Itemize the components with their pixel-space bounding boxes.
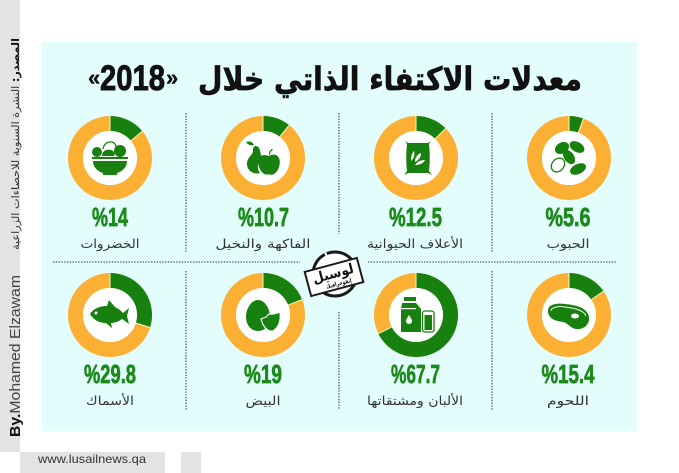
panel: animal feed (367, 116, 463, 252)
label: الفاكهة والنخيل (216, 236, 310, 252)
value: %15.4 (542, 359, 595, 389)
panel: meat (534, 273, 604, 409)
label: الخضروات (80, 236, 140, 252)
panel: fish (76, 273, 150, 408)
icon: beans (549, 139, 588, 177)
panel: fruit and dates (216, 116, 310, 252)
panel: vegetables (76, 116, 144, 252)
icon: salad bowl (92, 142, 128, 175)
title: « (88, 65, 100, 90)
stamp logo (305, 252, 363, 296)
panel: eggs (228, 273, 302, 409)
label: الأسماك (86, 393, 134, 408)
label: البيض (246, 393, 280, 409)
value: %10.7 (238, 202, 289, 232)
footer website bar (20, 452, 165, 473)
donut: fruit 10.7% (228, 116, 298, 192)
label: اللحوم (547, 393, 589, 409)
panel: dairy (367, 273, 463, 409)
label: الحبوب (546, 236, 590, 252)
footer website bar: www.lusailnews.qa (37, 452, 146, 466)
donut: vegetables 14% (76, 116, 144, 192)
value: %67.7 (391, 359, 440, 389)
donut: fish 29.8% (76, 273, 150, 350)
icon: pear and apple (246, 141, 280, 175)
icon: milk carton and glass (401, 297, 434, 332)
icon: steak (548, 304, 589, 329)
title: » (166, 65, 178, 90)
stamp logo: لوسيل (311, 261, 356, 287)
value: %12.5 (389, 202, 442, 232)
donut: dairy 67.7% (378, 273, 450, 350)
value: %5.6 (546, 202, 590, 232)
stamp logo: إنفوجرافيك (326, 277, 352, 291)
main panel background (42, 42, 637, 431)
value: %14 (92, 202, 128, 232)
value: %29.8 (84, 359, 136, 389)
footer gray square (181, 452, 201, 473)
author credit: By.Mohamed Elzawam (8, 275, 24, 437)
title (88, 59, 582, 98)
icon: fish (90, 300, 129, 328)
donut: feed 12.5% (382, 116, 450, 192)
panel: grains (534, 116, 604, 252)
title: 2018 (100, 59, 165, 98)
label: الألبان ومشتقاتها (367, 393, 463, 409)
label: الأعلاف الحيوانية (367, 236, 463, 252)
donut: meat 15.4% (534, 273, 604, 350)
donut: grains 5.6% (534, 116, 604, 192)
donut: eggs 19% (228, 273, 302, 350)
source credit: المصدر: النشرة السنوية للاحصاءات الزراعية (10, 38, 22, 250)
icon: feed sack (404, 141, 432, 175)
title: معدلات الاكتفاء الذاتي خلال (198, 60, 582, 98)
vertical and horizontal dotted dividers (53, 113, 616, 410)
value: %19 (244, 359, 282, 389)
left gray strip (0, 0, 20, 452)
icon: egg and shell (246, 300, 280, 331)
